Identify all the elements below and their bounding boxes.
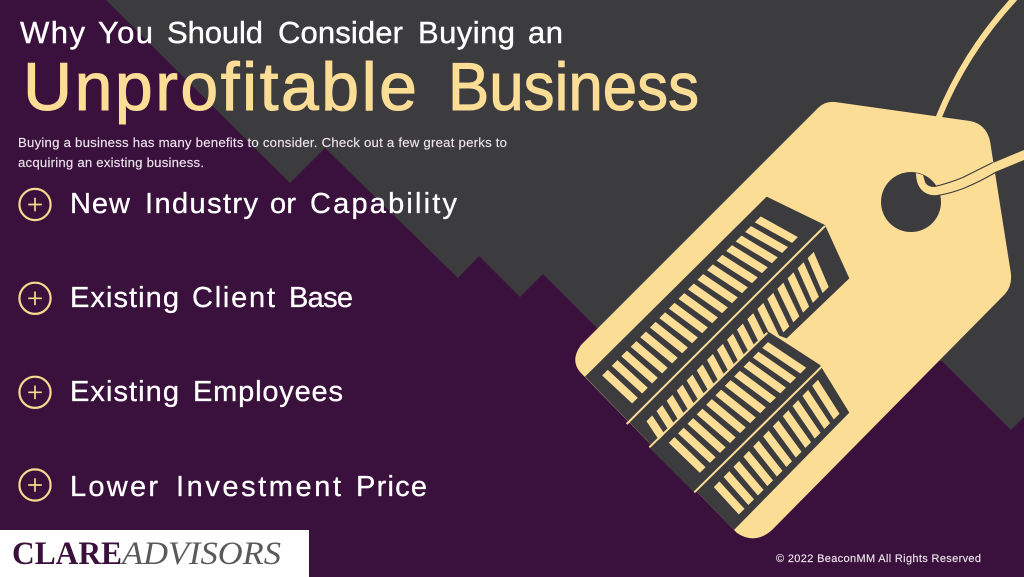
list item: client base <box>19 282 353 314</box>
icon: price tag with buildings <box>575 0 1024 538</box>
icon: plus circle <box>19 189 51 220</box>
label: Price <box>356 471 427 503</box>
label: New <box>70 188 131 220</box>
upper building wall windows <box>649 255 826 438</box>
building edge highlights <box>627 226 825 492</box>
label: Employees <box>193 376 343 408</box>
label: Base <box>289 282 353 314</box>
label: Investment <box>176 471 341 503</box>
background: dark zigzag shape <box>106 0 1024 430</box>
label: Capability <box>310 188 458 220</box>
title line 1: an <box>528 15 563 50</box>
title line 2: Unprofitable <box>23 49 417 125</box>
label: Existing <box>70 376 179 408</box>
intro text: acquiring an existing business. <box>18 155 204 170</box>
list item: new industry <box>19 188 458 220</box>
icon: plus circle <box>19 283 51 314</box>
logo word: Clare: CLARE <box>12 536 122 572</box>
intro text: Buying a business has many benefits to consider. Check out a few great perks to <box>18 135 507 150</box>
label: Existing <box>70 282 179 314</box>
list item: investment price <box>19 469 427 503</box>
building silhouette <box>585 197 849 530</box>
icon: plus circle <box>19 469 51 501</box>
title line 1: Buying <box>418 15 515 50</box>
label: or <box>270 188 296 220</box>
label: Industry <box>145 188 258 220</box>
logo word: Advisors: ADVISORS <box>120 536 281 572</box>
upper building roof windows <box>605 219 795 401</box>
copyright: © 2022 BeaconMM All Rights Reserved <box>776 553 981 565</box>
lower building roof block <box>650 332 822 493</box>
list item: employees <box>19 376 343 408</box>
title line 1: You <box>98 15 153 50</box>
tag body <box>575 102 1011 538</box>
title line 1: Should <box>167 15 263 50</box>
label: Lower <box>70 471 158 503</box>
lower building roof windows <box>672 345 803 470</box>
label: Client <box>192 282 275 314</box>
logo: Clare Advisors <box>0 530 309 577</box>
tag hole <box>881 172 941 232</box>
tag string: lower loop <box>916 150 1024 195</box>
lower building wall windows <box>717 383 837 512</box>
title line 2: Business <box>448 49 699 125</box>
tag string: upper <box>938 0 1015 119</box>
title line 1: Consider <box>278 15 403 50</box>
icon: plus circle <box>19 377 51 408</box>
title line 1: Why <box>20 15 86 50</box>
buildings illustration <box>585 197 849 530</box>
